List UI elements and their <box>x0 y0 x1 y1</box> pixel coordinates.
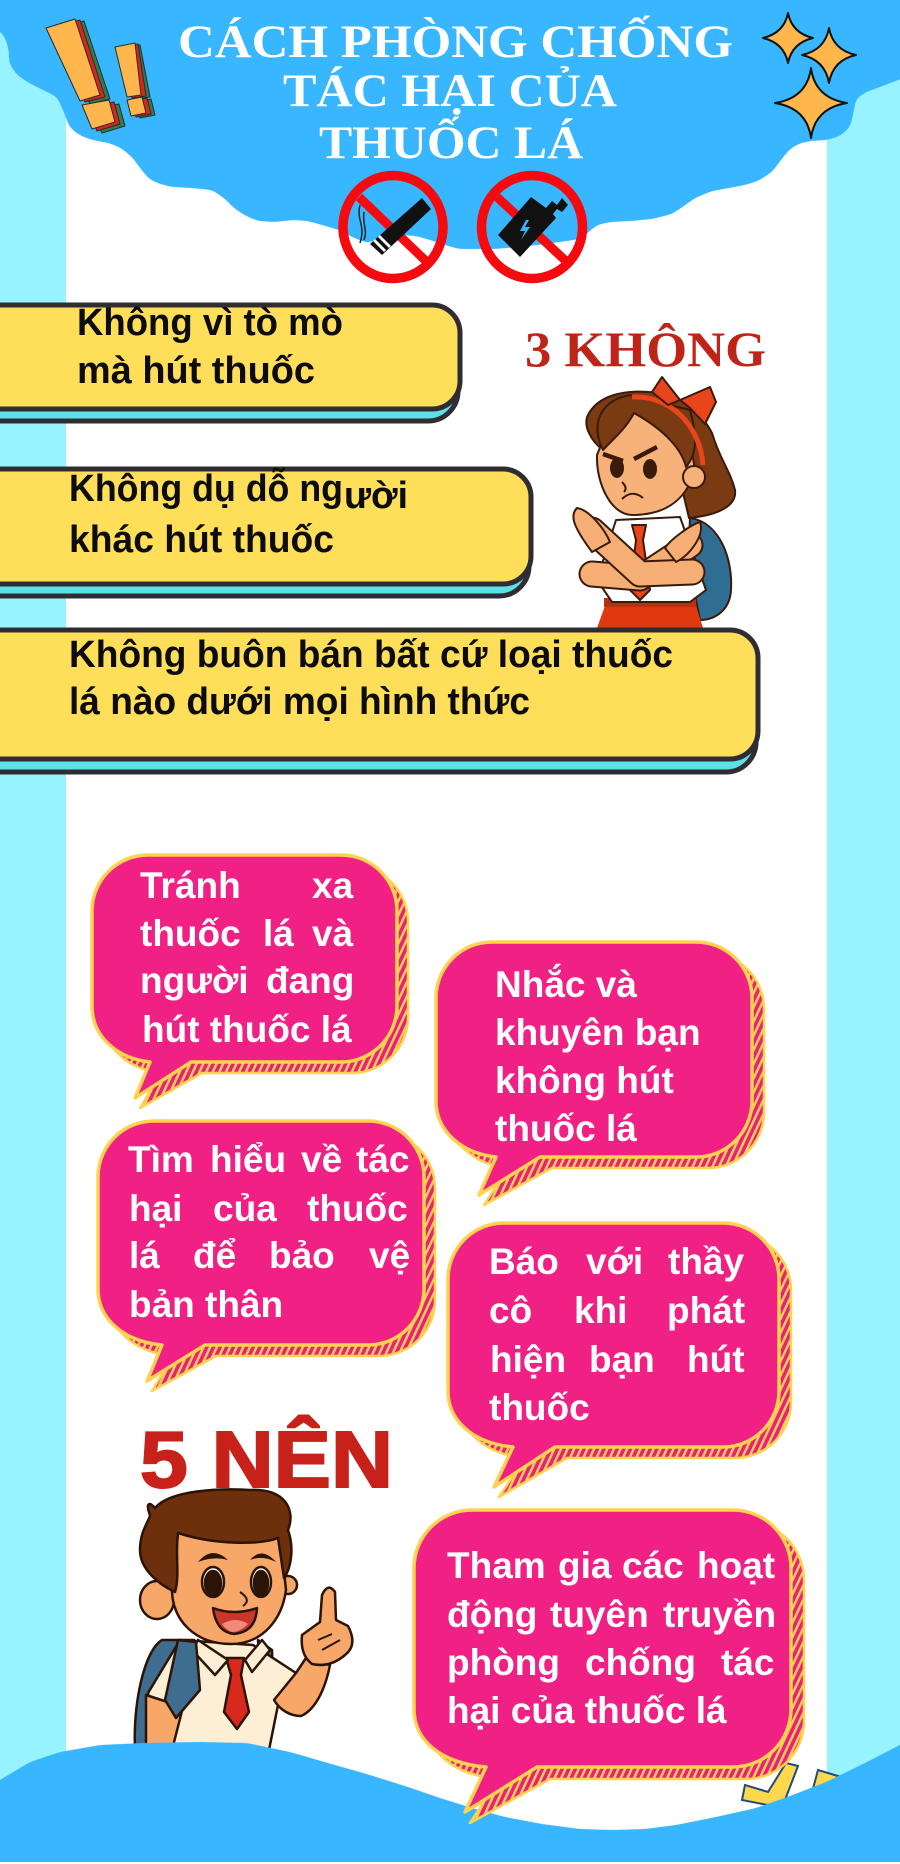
speech bubble: report: khi <box>574 1290 627 1331</box>
illustration: boy pointing up <box>135 1489 352 1750</box>
bar: first rule: Không vì tò mò <box>77 302 343 344</box>
speech bubble: report: thuốc <box>489 1387 590 1428</box>
title: TÁC HẠI CỦA <box>283 65 617 117</box>
speech bubble: report: Báo <box>489 1241 559 1282</box>
speech bubble: learn: vệ <box>369 1235 410 1276</box>
speech bubble: join: tác <box>721 1642 774 1683</box>
title: CÁCH PHÒNG CHỐNG <box>178 15 733 68</box>
icon: no smoking <box>343 176 443 278</box>
bar: third rule <box>0 630 758 772</box>
decoration: yellow chevrons <box>742 1763 838 1807</box>
speech bubble: join: các <box>622 1545 684 1586</box>
icon: sparkle stars <box>763 13 856 138</box>
speech bubble: avoid: thuốc <box>140 913 241 954</box>
speech bubble: join: phòng <box>447 1642 560 1683</box>
speech bubble: remind: khuyên bạn <box>495 1012 701 1053</box>
speech bubble: report <box>448 1223 791 1497</box>
title: THUỐC LÁ <box>319 116 583 169</box>
speech bubble: join: truyền <box>663 1594 776 1635</box>
icon: no vaping <box>482 176 582 278</box>
speech bubble: learn: thuốc <box>307 1188 408 1229</box>
speech bubble: learn: hại <box>129 1188 182 1229</box>
speech bubble: report: phát <box>667 1290 745 1331</box>
speech bubble: remind <box>436 942 764 1205</box>
speech bubble: avoid: và <box>312 913 354 954</box>
speech bubble: avoid: lá <box>263 913 294 954</box>
speech bubble: learn: Tìm <box>128 1139 194 1180</box>
speech bubble: join: hại của thuốc lá <box>447 1690 727 1731</box>
header cloud <box>0 0 900 249</box>
bar: second rule: Không dụ dỗ ng <box>69 466 343 510</box>
speech bubble: avoid: hút thuốc lá <box>142 1009 352 1050</box>
bar: second rule: ười <box>344 475 408 517</box>
heading: 3 KHÔNG: 3 KHÔNG <box>525 321 766 377</box>
speech bubble: learn: bảo <box>269 1235 335 1276</box>
side band right <box>827 0 900 1864</box>
speech bubble: learn: hiểu <box>210 1139 286 1180</box>
speech bubble: learn: tác <box>356 1139 409 1180</box>
speech bubble: join: Tham <box>447 1545 546 1586</box>
speech bubble: learn: lá <box>129 1235 160 1276</box>
speech bubble: report: thầy <box>668 1241 744 1282</box>
speech bubble: join: hoạt <box>697 1545 775 1586</box>
speech bubble: report: với <box>586 1241 643 1282</box>
speech bubble: avoid <box>92 855 408 1108</box>
speech bubble: avoid: Tránh <box>140 865 241 906</box>
bottom wave <box>0 1725 900 1864</box>
heading: 5 NÊN: 5 NÊN <box>140 1415 393 1504</box>
icon: exclamation marks <box>46 19 155 133</box>
speech bubble: join <box>414 1510 804 1823</box>
speech bubble: remind: Nhắc và <box>495 963 637 1005</box>
speech bubble: learn: của <box>213 1188 277 1229</box>
bar: third rule: Không buôn bán bất cứ loại thuốc <box>69 634 673 676</box>
speech bubble: avoid: đang <box>266 960 354 1001</box>
speech bubble: learn: để <box>193 1235 236 1276</box>
bar: first rule: mà hút thuốc <box>77 350 315 392</box>
speech bubble: join: động <box>447 1594 537 1635</box>
speech bubble: report: hút <box>687 1339 745 1380</box>
speech bubble: join: gia <box>558 1545 612 1586</box>
title <box>178 15 733 169</box>
speech bubble: remind: không hút <box>495 1060 674 1101</box>
speech bubble: join: chống <box>585 1642 696 1683</box>
speech bubble: remind: thuốc lá <box>495 1108 637 1149</box>
bar: first rule <box>0 302 460 421</box>
bar: second rule <box>0 466 531 596</box>
speech bubble: learn: bản thân <box>129 1284 283 1325</box>
speech bubble: learn: về <box>301 1139 342 1180</box>
speech bubble: report: cô <box>489 1290 532 1331</box>
speech bubble: avoid: xa <box>312 865 354 906</box>
side band left <box>0 0 66 1864</box>
bar: second rule: khác hút thuốc <box>69 519 334 561</box>
bar: third rule: lá nào dưới mọi hình thức <box>69 681 530 723</box>
speech bubble: avoid: người <box>140 960 249 1001</box>
speech bubble: report: bạn <box>589 1339 655 1380</box>
bottom strip <box>0 1862 900 1864</box>
speech bubble: learn <box>98 1121 435 1391</box>
illustration: girl crossing arms <box>573 377 735 628</box>
speech bubble: report: hiện <box>490 1339 566 1380</box>
speech bubble: join: tuyên <box>550 1594 649 1635</box>
